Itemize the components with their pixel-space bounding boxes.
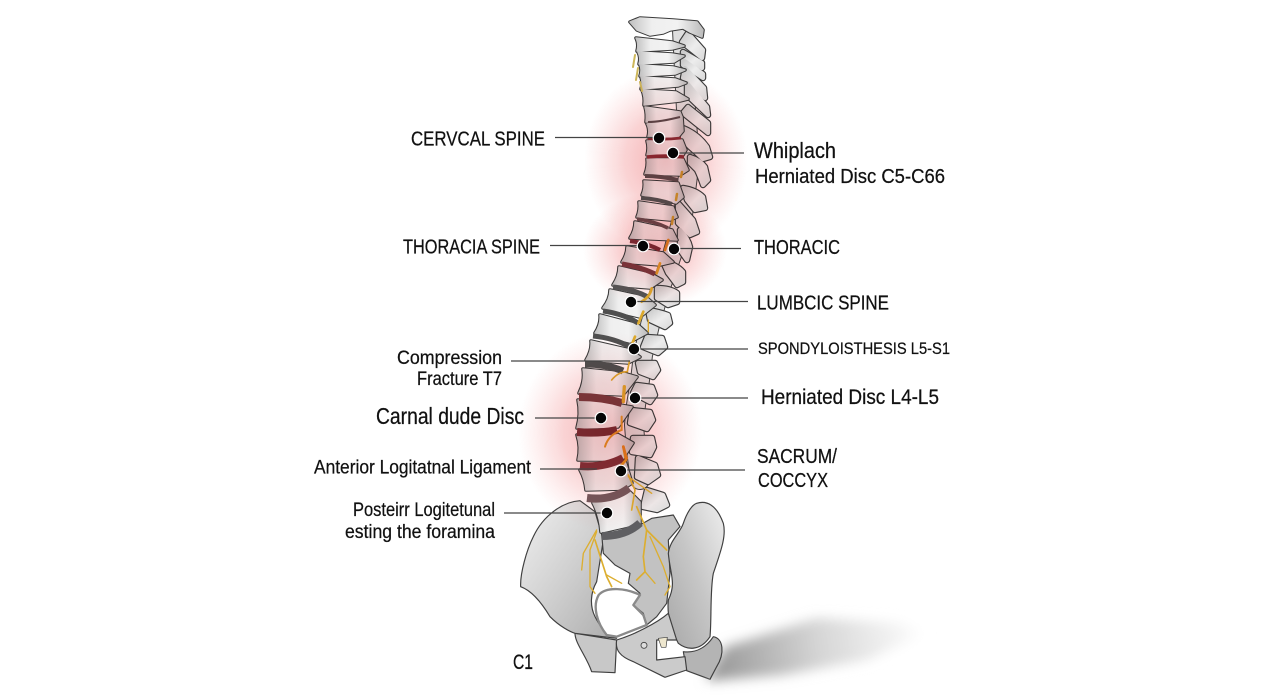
- label: sacrum coccyx: SACRUM/: [757, 446, 837, 468]
- label: spondyloisthesis: SPONDYLOISTHESIS L5-S1: [758, 339, 950, 358]
- nerves: mid spine: [605, 240, 668, 467]
- right ilium: [668, 502, 724, 648]
- label: posterior ligament: Posteirr Logitetunal: [353, 499, 495, 521]
- vertebral bodies: [577, 18, 703, 532]
- nerves: upper: [633, 55, 682, 224]
- ground shadow: [705, 618, 927, 681]
- label: compression fracture: Fracture T7: [417, 368, 502, 390]
- bottom fade of pelvis: [560, 676, 710, 698]
- label: sacrum coccyx: [757, 446, 837, 492]
- label: posterior ligament: [345, 499, 495, 543]
- inflammation glow: cervical: [584, 68, 748, 252]
- label: thoracia spine: THORACIA SPINE: [403, 236, 540, 258]
- label: sacrum coccyx: COCCYX: [758, 470, 828, 492]
- small joint detail: [641, 637, 667, 648]
- sacrum: [602, 515, 680, 625]
- pelvic opening: [596, 589, 647, 637]
- label: carnal dude disc: Carnal dude Disc: [376, 403, 524, 429]
- intervertebral discs: [577, 117, 684, 536]
- label: herniated disc L4-L5: Herniated Disc L4-L5: [761, 385, 939, 409]
- label: whiplash and herniated disc: Whiplach: [754, 138, 836, 163]
- label: cervical spine: CERVCAL SPINE: [411, 128, 545, 150]
- right lower knob: [683, 637, 722, 679]
- label: posterior ligament: esting the foramina: [345, 521, 495, 543]
- articular pillar: [634, 30, 690, 480]
- spinous processes: [630, 33, 710, 510]
- leader lines: [504, 138, 748, 513]
- marker dots: [595, 132, 680, 519]
- left lower pubic bone: [575, 633, 617, 673]
- pubic bone front: [616, 613, 687, 677]
- pelvis: [521, 501, 724, 679]
- label: lumbcic spine: LUMBCIC SPINE: [757, 292, 889, 314]
- background glow: thoracic: [583, 192, 727, 308]
- label: compression fracture: Compression: [397, 347, 502, 369]
- background glow: lumbar: [518, 332, 702, 532]
- background glow: cervical: [584, 68, 748, 252]
- left ilium: [521, 501, 617, 638]
- label: C1: C1: [513, 651, 533, 674]
- label: whiplash and herniated disc: [754, 138, 945, 188]
- label: whiplash and herniated disc: Herniated Disc C5-C66: [755, 166, 945, 188]
- label: anterior ligament: Anterior Logitatnal Ligament: [314, 458, 532, 478]
- inflammation glow: lumbar: [518, 332, 702, 532]
- label: compression fracture: [397, 347, 502, 390]
- label: thoracic: THORACIC: [754, 237, 840, 259]
- nerves: sacral plexus: [582, 447, 670, 595]
- inflammation glow: thoracic: [583, 192, 727, 308]
